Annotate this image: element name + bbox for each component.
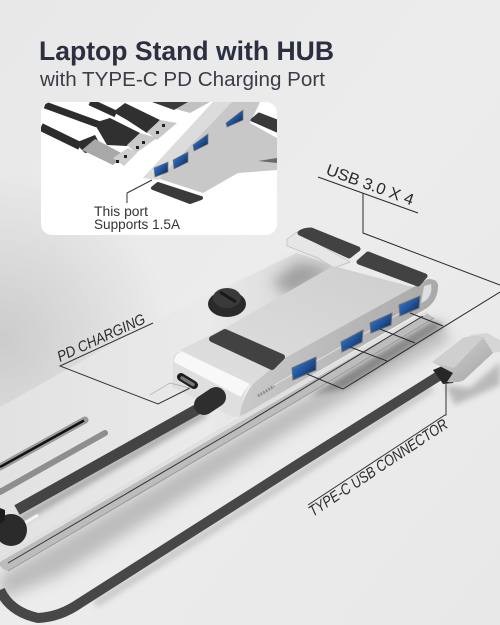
USB port 2 (341, 330, 363, 352)
hub top surface (180, 266, 437, 386)
connector top face (432, 336, 483, 368)
pad 1 (300, 230, 358, 256)
USB port 1 (292, 357, 316, 380)
cable shadow (95, 388, 432, 604)
connector shadow (445, 362, 500, 405)
connector grip (433, 364, 458, 384)
inset caption: Supports 1.5A (94, 217, 180, 232)
base strip (0, 312, 434, 571)
laptop stand with hub (0, 230, 450, 600)
callout: PD charging: PD CHARGING (55, 311, 148, 366)
pad 2 (359, 254, 425, 284)
connector body (432, 336, 493, 382)
USB port 4 (399, 296, 420, 316)
inset callout line (127, 180, 152, 203)
cable clip (208, 288, 246, 317)
pad 3 (212, 332, 282, 367)
hub end cap highlight (421, 284, 431, 303)
soft shadow under stand (0, 320, 450, 600)
plate shadow under hub (272, 262, 335, 296)
callout: PD charging (55, 311, 190, 404)
Type-C cable and connector (0, 333, 500, 618)
inner cable (0, 397, 216, 546)
inset caption: This port (94, 204, 148, 219)
stand plate (0, 253, 345, 558)
connector tip (470, 333, 500, 353)
hub groove (262, 303, 418, 392)
USB port 3 (370, 313, 392, 333)
cable (0, 372, 445, 618)
hub front face (238, 279, 438, 417)
title: Laptop Stand with HUB (39, 36, 334, 66)
hub end block (172, 352, 250, 417)
ventilation slots (0, 420, 105, 492)
subtitle: with TYPE-C PD Charging Port (39, 69, 325, 91)
rear tab (287, 232, 350, 268)
dark shadow under hub (310, 320, 444, 396)
callout: USB 3.0 X 4 (307, 162, 500, 389)
icon: USB-C port (181, 377, 194, 385)
callout: Type-C USB connector: TYPE-C USB CONNECTOR (306, 416, 451, 520)
brand mark (258, 386, 274, 396)
callout: USB 3.0 X 4: USB 3.0 X 4 (324, 162, 416, 209)
inset illustration: USB plugs (41, 102, 277, 202)
panel: inset detail of 1.5A port (41, 102, 277, 235)
